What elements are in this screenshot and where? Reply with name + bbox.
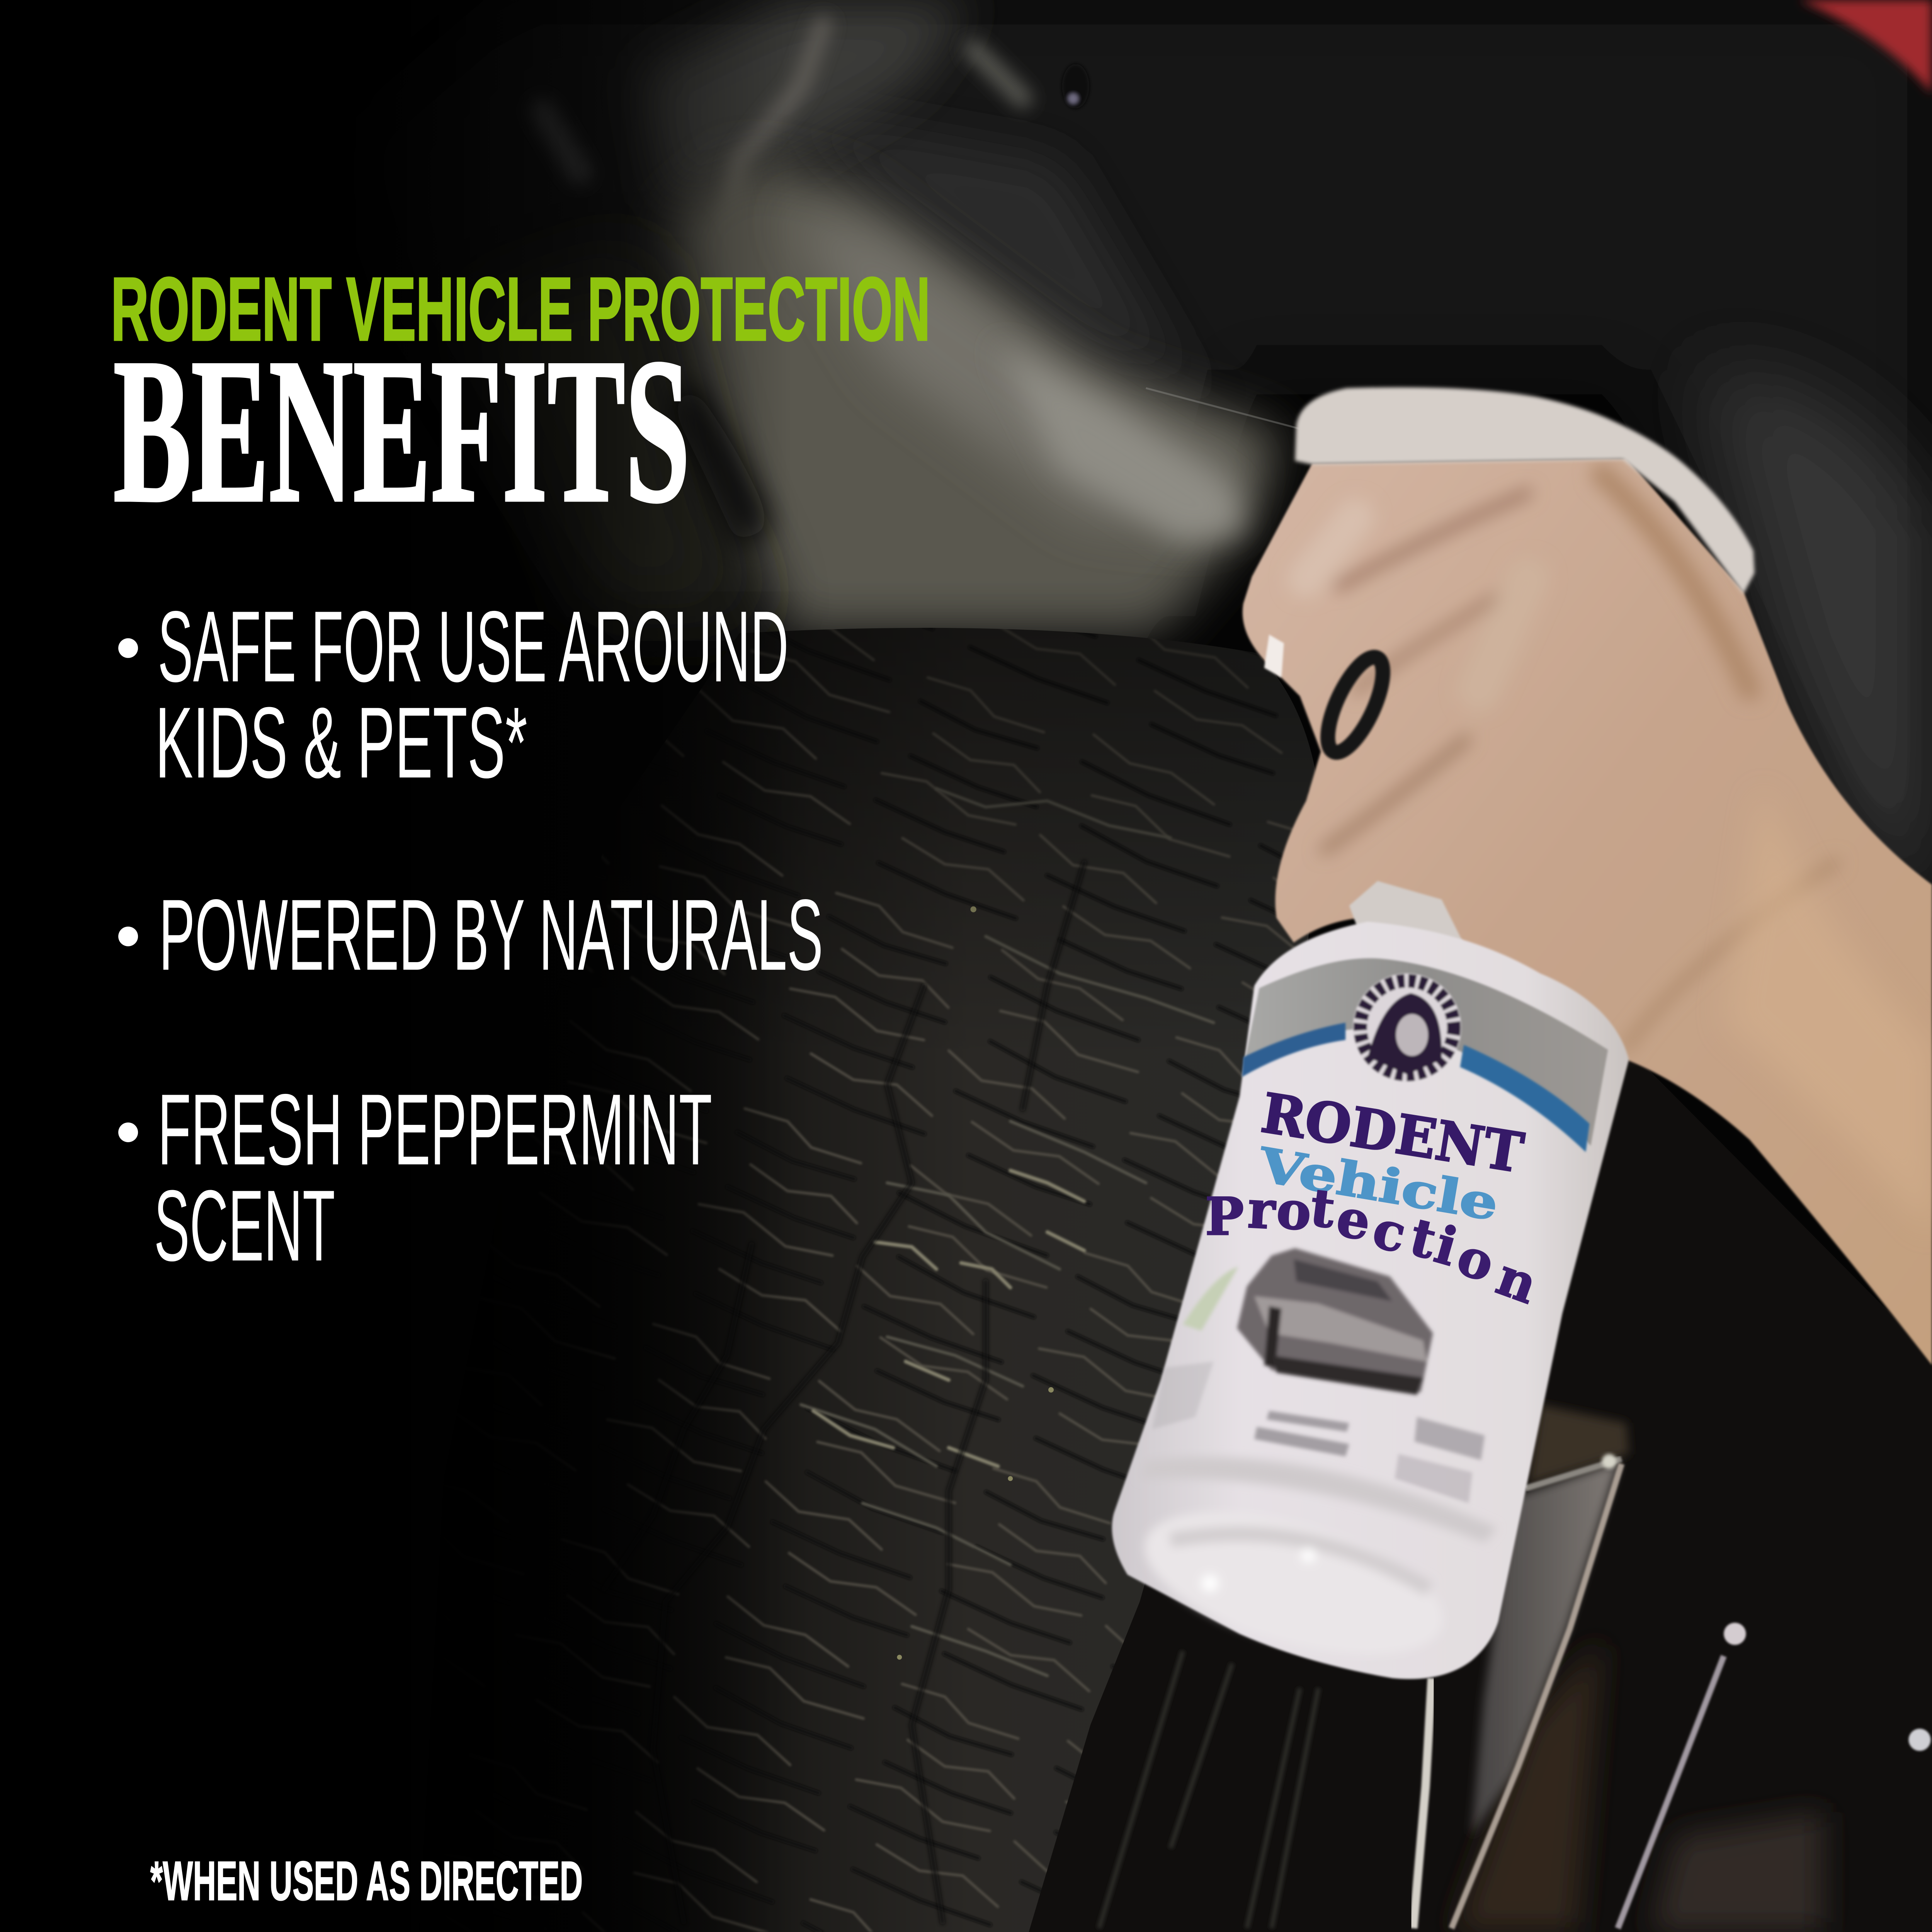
bottle top gray label area bbox=[1245, 958, 1608, 1146]
bullet: fresh peppermint scent: SCENT bbox=[154, 1169, 335, 1282]
bullet: safe for use: KIDS & PETS* bbox=[155, 686, 527, 799]
tire grooves bbox=[604, 862, 1084, 1922]
tire tread texture bbox=[419, 616, 1355, 1932]
leaf accent bbox=[1183, 1267, 1238, 1331]
spray jet bbox=[1146, 388, 1300, 429]
bolt hole bbox=[1062, 64, 1089, 109]
top streaks bbox=[542, 25, 1023, 234]
RODENT: RODENT bbox=[1257, 1081, 1527, 1185]
arm and hand bbox=[1243, 458, 1932, 1365]
bottle neck bbox=[1349, 881, 1479, 973]
tire highlights bbox=[813, 1170, 1084, 1466]
tire bbox=[599, 628, 1315, 1932]
tire specks bbox=[897, 906, 1054, 1660]
bullet: safe for use bbox=[118, 590, 789, 799]
bullet: fresh peppermint scent bbox=[118, 1073, 712, 1282]
lower right wheel well bbox=[1029, 986, 1932, 1932]
blue stripe bbox=[1242, 1023, 1345, 1077]
bullet: powered by naturals bbox=[118, 879, 823, 992]
sprayer trigger cap bbox=[1295, 387, 1755, 594]
chrome step bar bbox=[1099, 1405, 1931, 1928]
logo badge bbox=[1353, 973, 1461, 1082]
bullet: powered by naturals: POWERED BY NATURALS bbox=[159, 879, 823, 992]
Vehicle: Vehicle bbox=[1255, 1137, 1502, 1231]
wrist light bbox=[1725, 789, 1932, 1232]
Protection: Protection bbox=[1205, 1177, 1545, 1316]
bottle base bbox=[1129, 1457, 1497, 1683]
heading: benefits: BENEFITS bbox=[113, 316, 690, 545]
subtitle: rodent vehicle protection: RODENT VEHICLE PROTECTION bbox=[111, 259, 930, 359]
label title bbox=[1205, 1081, 1545, 1316]
ring bbox=[1317, 650, 1394, 760]
bullet: fresh peppermint scent: FRESH PEPPERMINT bbox=[158, 1073, 712, 1186]
tire tread lines bbox=[801, 789, 1214, 1676]
bullet: safe for use: SAFE FOR USE AROUND bbox=[158, 590, 789, 703]
fingernail bbox=[1264, 634, 1284, 678]
wheel arch bbox=[345, 0, 1932, 961]
brown under-body patches bbox=[1454, 1639, 1602, 1932]
spray bottle bbox=[1112, 881, 1629, 1683]
bottle body bbox=[1112, 922, 1629, 1679]
red body corner bbox=[1799, 0, 1932, 94]
footnote: *WHEN USED AS DIRECTED bbox=[150, 1850, 583, 1912]
dark groove beside mist bbox=[672, 382, 770, 548]
car picture bbox=[1237, 1248, 1433, 1395]
tire shadow falloff bbox=[419, 616, 1355, 1932]
spray mist bbox=[468, 160, 1281, 631]
finger shading bbox=[1306, 474, 1836, 1047]
small label print bbox=[1152, 1362, 1485, 1503]
